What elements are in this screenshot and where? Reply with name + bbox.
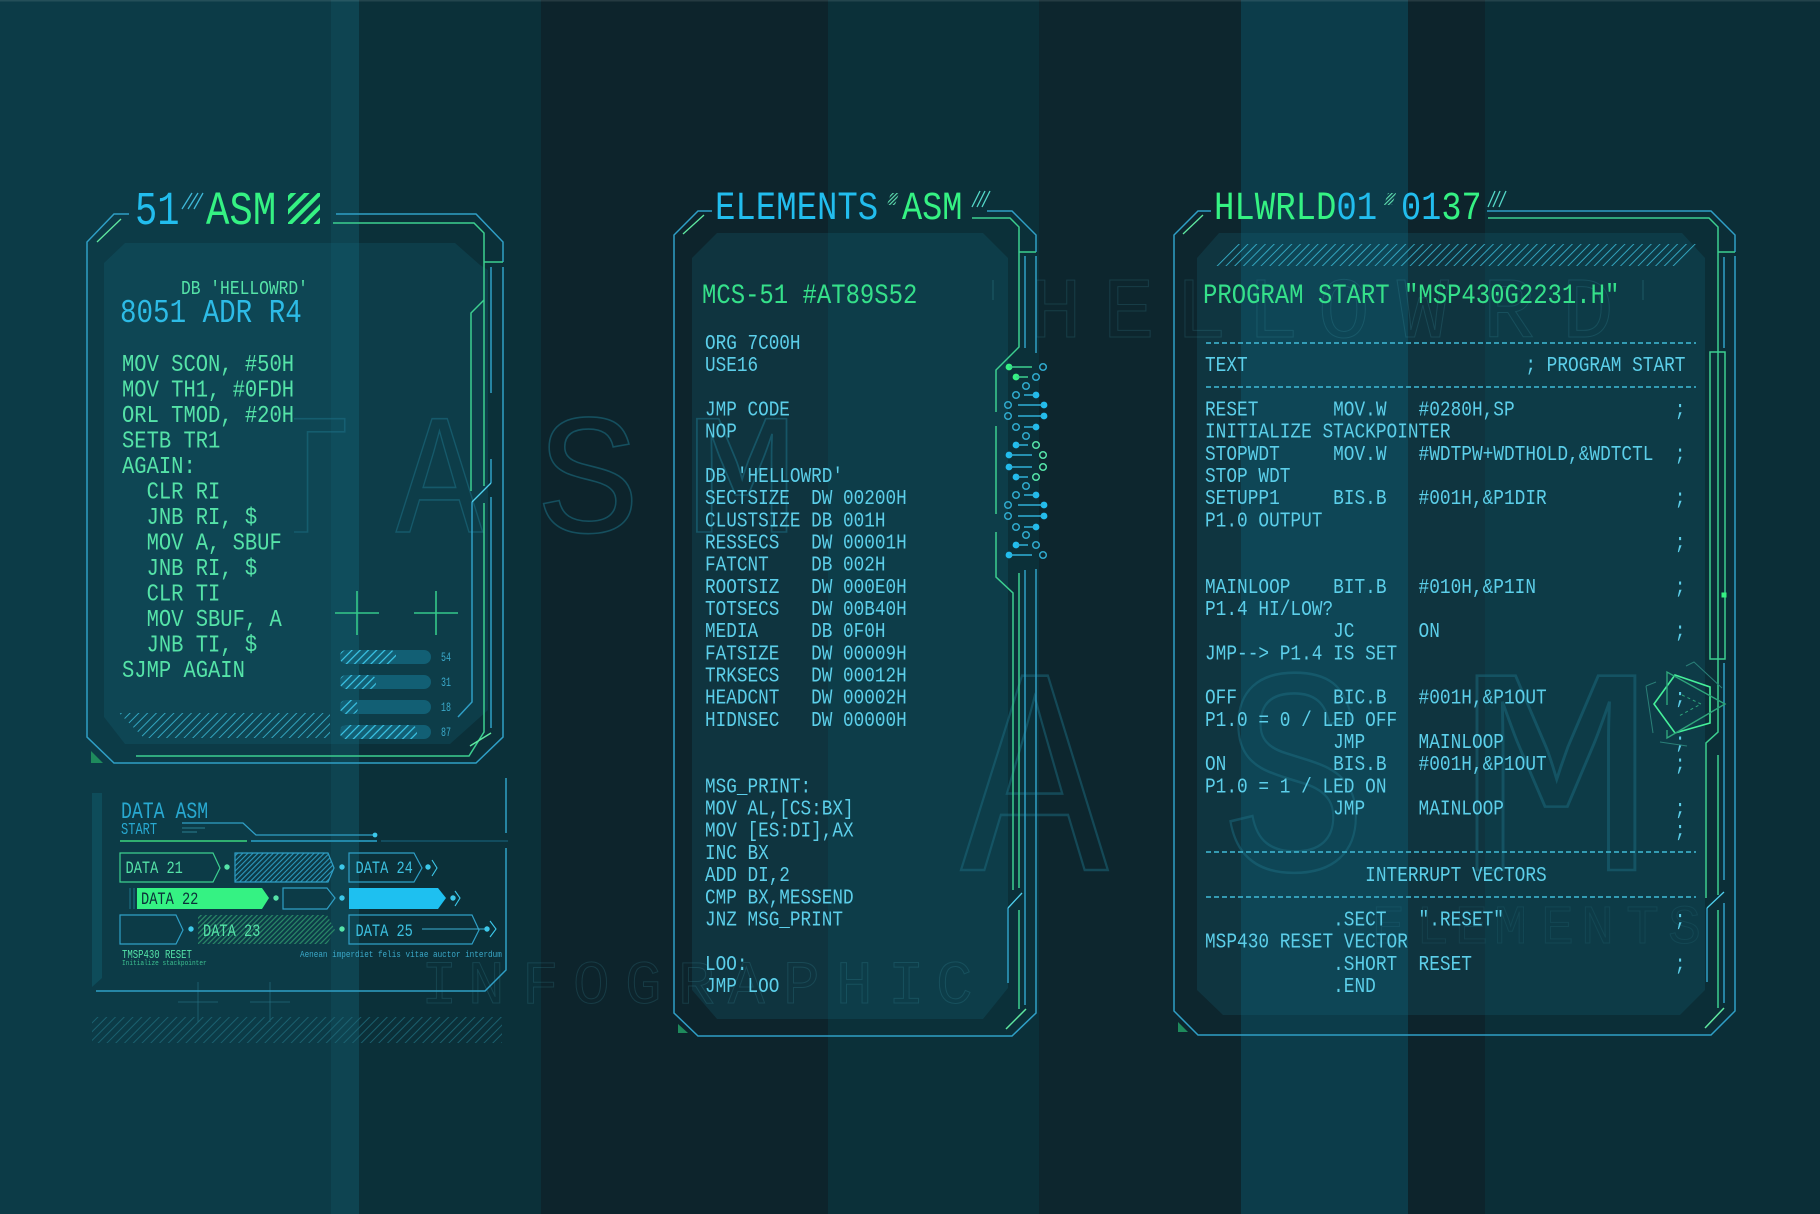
heading [135,185,320,238]
code block: TOTSECS DW 00B40H [705,598,907,621]
code block: JMP LOO [705,975,779,998]
heading: ASM [902,187,962,232]
crosshairs [335,591,458,635]
ghost word: large ASM: M [1456,624,1656,959]
heading [1214,187,1506,232]
code block: P1.0 = 0 / LED OFF [1205,709,1397,732]
ghost word: TASM: S [537,389,640,584]
ghost hatch band [92,1017,502,1043]
code block: ORG 7C00H [705,332,801,355]
captions [122,949,502,968]
code block: INITIALIZE STACKPOINTER [1205,420,1451,444]
code block: NOP [705,420,737,444]
heading: DATA ASM [121,800,208,826]
code block: USE16 [705,354,758,378]
panel: ELEMENTS ASM [674,187,1047,1036]
code block [705,332,907,998]
code block: INTERRUPT VECTORS [1205,864,1547,888]
row 1: DATA 21 [126,859,183,879]
progress bars: 87 [441,726,451,741]
code block: CLUSTSIZE DB 001H [705,509,885,533]
heading: HLWRLD01 [1214,187,1377,232]
code block: .SHORT RESET ; [1205,953,1685,976]
code block: HIDNSEC DW 00000H [705,709,907,732]
code block: SETUPP1 BIS.B #001H,&P1DIR ; [1205,487,1685,511]
captions: Aenean imperdiet felis vitae auctor interdum [300,949,502,960]
code block: JMP CODE [705,398,790,422]
code block: INC BX [705,842,769,865]
heading [715,187,990,232]
progress bars: 18 [441,701,451,716]
panel: DATA ASM [92,778,508,991]
code block [1205,354,1685,998]
DNA icon [1005,364,1047,558]
code block: JNB RI, $ [122,555,257,583]
code block: LOO: [705,952,747,976]
connector lines [96,778,508,991]
code block: HEADCNT DW 00002H [705,686,907,710]
code block: MSP430 RESET VECTOR [1205,930,1408,954]
row 1 [120,853,437,882]
code block: MSG_PRINT: [705,775,811,799]
code block: RESSECS DW 00001H [705,531,907,555]
code block: ; [1205,819,1685,843]
progress bars [340,650,451,741]
captions: TMSP430 RESET [122,949,192,962]
panel: 51 ASM [87,185,503,763]
heading [121,800,208,840]
progress bars: 31 [441,676,451,691]
code block: MAINLOOP BIT.B #010H,&P1IN ; [1205,576,1685,599]
code block: RESET MOV.W #0280H,SP ; [1205,398,1685,422]
code block: MOV SCON, #50H [122,351,294,379]
row 2: DATA 22 [141,890,198,910]
code block: .END [1205,975,1376,998]
code block: MOV SBUF, A [122,606,282,634]
heading: ASM [206,185,276,238]
code block: MOV TH1, #0FDH [122,376,294,404]
panel fill: right [1197,233,1705,1015]
ghost word: large ASM: A [961,625,1110,959]
row 3: DATA 25 [356,922,413,942]
code block: ORL TMOD, #20H [122,402,294,430]
dashed separators [1206,343,1696,897]
code block: ; [1205,531,1685,555]
ghost word: TASM: T [248,389,351,584]
code block: OFF BIC.B #001H,&P1OUT ; [1205,686,1685,710]
code block [122,351,294,685]
ghost word: TASM: M [685,389,799,584]
panel: HLWRLD01 0137 [1174,187,1735,1035]
code block: P1.4 HI/LOW? [1205,598,1333,621]
hatch strip [119,713,330,738]
ghost word: TASM [294,416,788,534]
hatch strip [1215,244,1700,266]
ghost word: HELLOWRD: HELLOWRD [1030,265,1614,363]
sub heading: MCS-51 #AT89S52 [702,279,917,312]
ghost word: large ASM: S [1221,625,1368,959]
code block: CLR TI [122,580,220,608]
code block: JMP--> P1.4 IS SET [1205,642,1397,666]
frame [674,211,1036,1036]
ghost word: ELEMENTS: ELEMENTS [1372,897,1701,960]
ghost word: large ASM [961,624,1656,959]
frame [87,214,503,763]
code block: JNB TI, $ [122,631,257,659]
code block: P1.0 OUTPUT [1205,509,1322,533]
row 1: DATA 24 [356,859,413,879]
sub heading: DB 'HELLOWRD' [181,279,308,301]
heading: 0137 [1401,187,1482,232]
code block: MOV A, SBUF [122,529,282,557]
frame [1174,211,1735,1035]
code block: STOPWDT MOV.W #WDTPW+WDTHOLD,&WDTCTL ; [1205,443,1685,466]
code block: JMP MAINLOOP ; [1205,731,1685,755]
heading: 51 [135,185,180,238]
code block: SETB TR1 [122,427,220,455]
code block: CLR RI [122,478,220,506]
code block: JNZ MSG_PRINT [705,908,843,932]
code block: CMP BX,MESSEND [705,886,854,910]
code block: MOV AL,[CS:BX] [705,797,854,821]
code block: ON BIS.B #001H,&P1OUT ; [1205,753,1685,777]
code block: MOV [ES:DI],AX [705,819,854,843]
heading: ELEMENTS [715,187,878,232]
row 3 [120,915,496,944]
code block: TEXT ; PROGRAM START [1205,354,1685,378]
ghost word: INFOGRAPHIC: INFOGRAPHIC [421,953,973,1022]
code block: AGAIN: [122,453,196,481]
code block: ROOTSIZ DW 000E0H [705,576,907,599]
sub heading: PROGRAM START "MSP430G2231.H" [1203,279,1619,312]
code block: FATCNT DB 002H [705,553,885,577]
progress bars: 54 [441,651,451,666]
pentagon icon [1646,662,1725,746]
sub heading [120,279,308,333]
code block: P1.0 = 1 / LED ON [1205,775,1387,799]
code block: DB 'HELLOWRD' [705,465,843,488]
ghost tick marks [993,280,1643,300]
code block: JNB RI, $ [122,504,257,532]
row 3: DATA 23 [203,922,260,942]
heading: START [121,821,157,840]
sub heading: 8051 ADR R4 [120,296,302,333]
panel fill: middle [692,233,1008,1019]
code block: TRKSECS DW 00012H [705,664,907,688]
row 2 [130,888,460,910]
code block: SJMP AGAIN [122,657,245,685]
panel fill: left [104,243,488,744]
ghost word: TASM: A [396,389,483,584]
code block: FATSIZE DW 00009H [705,642,907,666]
code block: JC ON ; [1205,620,1685,644]
code block: JMP MAINLOOP ; [1205,797,1685,821]
captions: Initialize stackpointer [122,960,207,968]
code block: ADD DI,2 [705,864,790,888]
code block: STOP WDT [1205,465,1290,488]
code block: SECTSIZE DW 00200H [705,487,907,511]
code block: MEDIA DB 0F0H [705,620,885,644]
code block: .SECT ".RESET" ; [1205,908,1685,932]
ghost crosses [178,982,290,1022]
side bar [92,793,102,987]
